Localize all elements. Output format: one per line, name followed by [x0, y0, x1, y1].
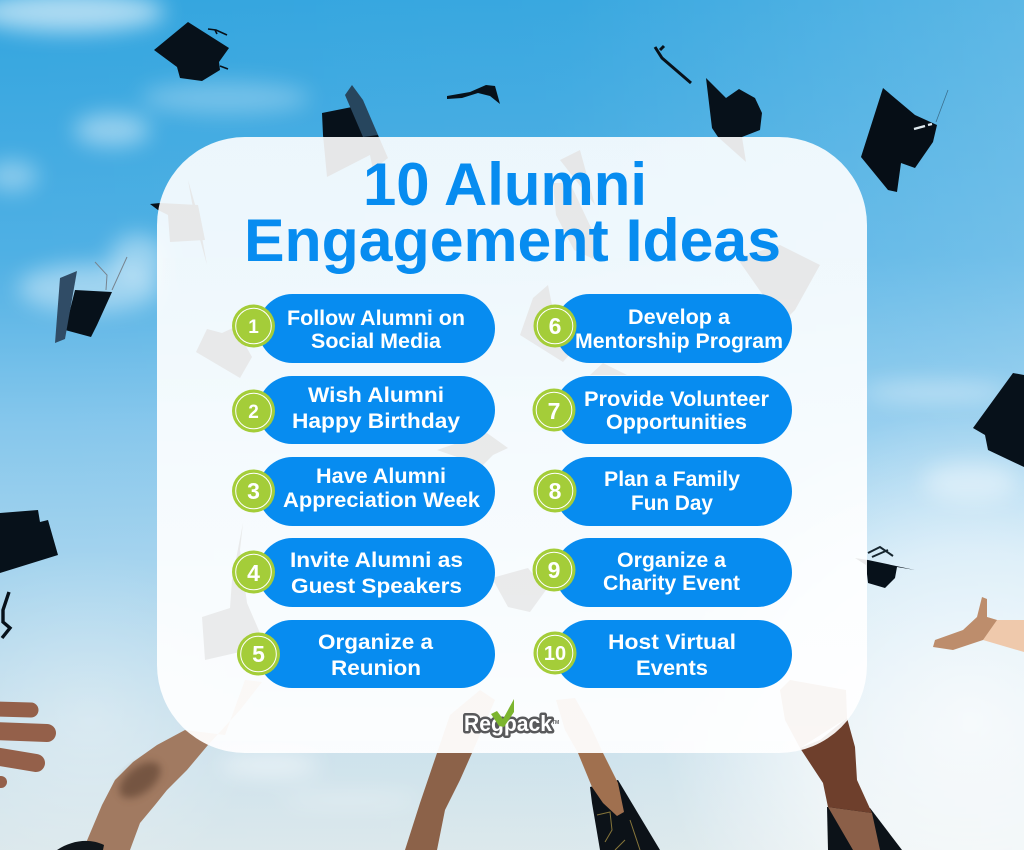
idea 1 — [232, 294, 495, 363]
title: 10 Alumni — [363, 151, 647, 218]
idea 5: 5 — [252, 641, 265, 667]
idea 1: 1 — [248, 317, 259, 338]
logo: Regpack — [464, 699, 559, 736]
idea 6: Develop a — [628, 306, 730, 329]
tassel: top centre — [447, 85, 500, 104]
idea 3: 3 — [247, 478, 260, 504]
title: Engagement Ideas — [244, 207, 781, 274]
cap: right edge — [973, 373, 1024, 467]
idea 4: Invite Alumni as — [290, 549, 463, 572]
idea 10: 10 — [544, 643, 566, 665]
idea 3: Have Alumni — [316, 465, 446, 488]
idea 5 — [237, 620, 495, 688]
idea 7: 7 — [548, 398, 560, 424]
left fingers — [0, 709, 47, 782]
cap: upper right centre — [706, 78, 762, 162]
arm: right — [780, 680, 902, 850]
idea 7 — [532, 376, 792, 444]
idea 3: Appreciation Week — [283, 489, 480, 512]
cap: left — [55, 257, 127, 343]
idea 1: Follow Alumni on — [287, 307, 465, 330]
idea 10: Host Virtual — [608, 631, 736, 654]
idea 2 — [232, 376, 495, 444]
icon: green check mark — [491, 699, 514, 727]
idea 1: Social Media — [311, 330, 441, 353]
cap: top left — [154, 22, 229, 81]
idea 4 — [232, 538, 495, 607]
idea 2: Wish Alumni — [308, 384, 444, 407]
idea 7: Opportunities — [606, 411, 747, 434]
idea 9: Charity Event — [603, 572, 740, 595]
idea 6 — [534, 294, 792, 363]
title — [244, 151, 781, 274]
tassel: upper right — [655, 46, 691, 83]
logo: Regpack: TM — [552, 720, 559, 726]
idea 9: 9 — [548, 557, 560, 583]
idea 8: 8 — [549, 478, 562, 504]
idea 2: Happy Birthday — [292, 410, 460, 433]
logo: Regpack: Regpack — [464, 711, 553, 736]
arm: centre right — [556, 698, 660, 850]
idea 9: Organize a — [617, 549, 726, 572]
idea 5: Organize a — [318, 631, 433, 654]
idea 9 — [532, 538, 792, 607]
cap silhouettes behind panel — [188, 150, 820, 660]
idea 6: Mentorship Program — [575, 330, 783, 353]
idea 3 — [232, 457, 495, 526]
idea 8: Fun Day — [631, 492, 713, 515]
cap: small lower right — [855, 547, 915, 588]
graduation caps thrown in the air — [0, 22, 1024, 660]
idea 4: 4 — [247, 560, 260, 586]
panel: translucent white card — [157, 137, 867, 753]
idea 8: Plan a Family — [604, 468, 740, 491]
idea 7: Provide Volunteer — [584, 388, 769, 411]
idea 10 — [534, 620, 792, 688]
idea 10: Events — [636, 657, 708, 680]
idea 5: Reunion — [331, 657, 421, 680]
arm: centre left — [405, 690, 495, 850]
cap: lower left — [0, 510, 58, 638]
idea 2: 2 — [248, 402, 259, 423]
idea 8 — [534, 457, 792, 526]
raised arms and hands — [0, 597, 1024, 850]
arm: lower left — [57, 680, 262, 850]
hand: right edge — [933, 597, 1024, 652]
idea 4: Guest Speakers — [291, 575, 462, 598]
idea 6: 6 — [549, 313, 561, 339]
small cap fragment at panel edge — [150, 203, 205, 242]
cap: top centre — [322, 85, 388, 177]
cap: upper right — [861, 88, 948, 192]
